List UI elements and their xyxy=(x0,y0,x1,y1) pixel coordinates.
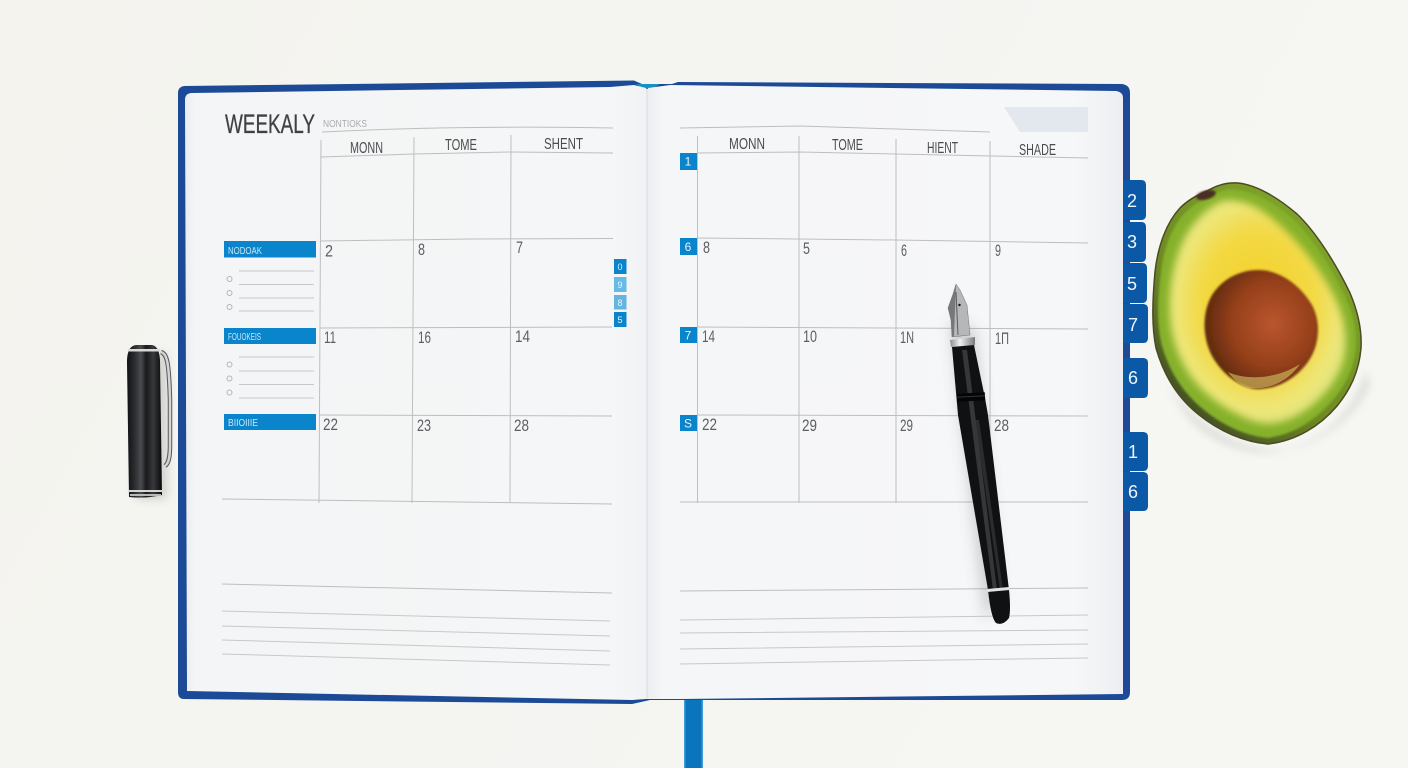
right date numbers: 28 xyxy=(994,416,1009,435)
avocado stem scar xyxy=(1195,188,1217,202)
nib xyxy=(948,284,970,337)
left date numbers: 28 xyxy=(514,416,529,435)
left sidebar section 1: NODOAK xyxy=(228,246,262,257)
right date numbers: 10 xyxy=(803,327,817,346)
avocado green rim xyxy=(1158,189,1356,438)
mini index tabs: 8 xyxy=(617,298,623,308)
side index tabs: 5 xyxy=(1127,274,1137,294)
right week number boxes: 1 xyxy=(685,154,692,168)
right date numbers: 6 xyxy=(901,241,907,260)
right week number boxes: 6 xyxy=(685,240,692,254)
left column headers: MONN xyxy=(350,140,383,157)
avocado outline xyxy=(1153,183,1361,444)
barrel ring xyxy=(987,587,1010,592)
left sidebar section 3: BIIOIIIE xyxy=(228,418,258,429)
gutter backing xyxy=(640,89,654,699)
left page xyxy=(185,85,646,700)
side index tabs: 7 xyxy=(1128,315,1138,335)
left date numbers: 11 xyxy=(324,328,336,347)
right date numbers: 8 xyxy=(703,238,710,257)
left column headers: SHENT xyxy=(544,136,583,153)
right date numbers: 29 xyxy=(802,416,817,435)
avocado skin and flesh xyxy=(1154,184,1360,444)
right top note shape xyxy=(1004,107,1088,132)
left date numbers: 14 xyxy=(515,327,530,346)
ribbon bookmark xyxy=(684,699,703,768)
mini index tabs: 5 xyxy=(617,315,623,325)
avocado xyxy=(1145,175,1370,453)
title: WEEKALY: WEEKALY xyxy=(225,109,315,139)
right date numbers: 29 xyxy=(900,416,913,435)
left date numbers: 7 xyxy=(516,238,523,257)
side index tabs: 1 xyxy=(1128,442,1138,462)
right date numbers: 9 xyxy=(995,241,1001,260)
left column headers xyxy=(350,136,583,157)
right date numbers: 5 xyxy=(803,239,810,258)
mini index tabs: 9 xyxy=(617,280,623,290)
subtitle: NONTIOKS xyxy=(323,119,367,130)
right week number boxes: 7 xyxy=(685,328,692,342)
right week number boxes xyxy=(680,153,697,431)
left date numbers xyxy=(323,238,530,435)
left sidebar section 3 xyxy=(224,414,316,430)
avocado pit xyxy=(1204,270,1318,389)
right date numbers: 1N xyxy=(900,328,914,347)
left sidebar section 2: FOUOKEIS xyxy=(228,332,261,343)
right calendar grid xyxy=(680,126,1088,503)
right column headers xyxy=(729,136,1056,159)
side index tabs: 2 xyxy=(1127,191,1137,211)
right date numbers xyxy=(702,238,1009,435)
spine highlight xyxy=(636,84,660,90)
side index tabs: 3 xyxy=(1127,232,1137,252)
left sidebar section 1 xyxy=(224,241,316,311)
left date numbers: 2 xyxy=(325,242,333,260)
right column headers: HIENT xyxy=(927,140,958,157)
right page writing lines xyxy=(680,588,1088,664)
side index tabs: 6 xyxy=(1128,482,1138,502)
right column headers: SHADE xyxy=(1019,142,1056,159)
left calendar grid xyxy=(222,127,613,504)
right column headers: MONN xyxy=(729,136,765,153)
fountain pen xyxy=(948,284,1010,624)
left date numbers: 16 xyxy=(418,328,431,347)
left date numbers: 23 xyxy=(417,416,431,435)
left date numbers: 22 xyxy=(323,415,338,434)
planner scene xyxy=(127,80,1370,768)
right page xyxy=(648,85,1123,699)
right date numbers: 22 xyxy=(702,415,717,434)
side index tabs: 6 xyxy=(1128,368,1138,388)
barrel xyxy=(952,345,1010,624)
mini index tabs xyxy=(614,259,626,327)
pen cap xyxy=(127,345,170,500)
left sidebar section 2 xyxy=(224,328,316,398)
right date numbers: 1П xyxy=(995,329,1009,348)
notebook cover xyxy=(178,80,1130,704)
mini index tabs: 0 xyxy=(617,262,623,272)
left page writing lines xyxy=(222,584,612,665)
left column headers: TOME xyxy=(445,137,477,154)
right column headers: TOME xyxy=(832,137,863,154)
right date numbers: 14 xyxy=(702,327,715,346)
right week number boxes: S xyxy=(684,416,692,430)
avocado pale flesh xyxy=(1170,200,1346,423)
side index tabs xyxy=(1123,180,1148,511)
left date numbers: 8 xyxy=(418,240,425,259)
